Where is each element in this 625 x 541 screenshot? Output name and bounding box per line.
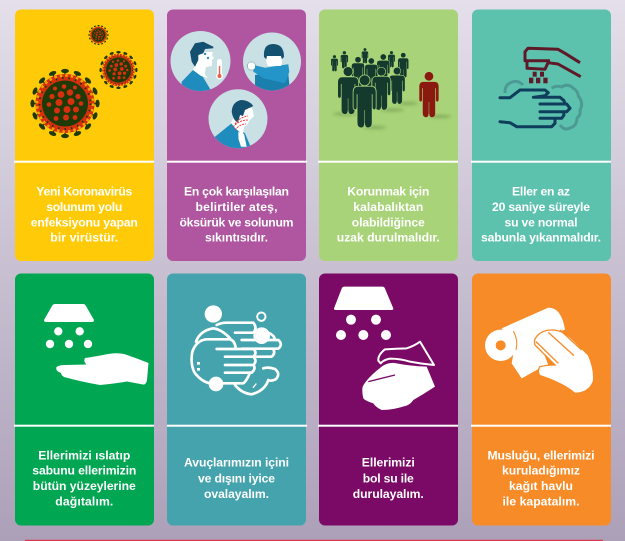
text: washing time description: sabunla yıkanmalıdır. xyxy=(481,231,601,245)
text: symptoms description xyxy=(180,185,294,245)
text: virus description: solunum yolu xyxy=(46,200,122,214)
text: symptoms description: En çok karşılaşılan xyxy=(184,185,289,199)
icon: crowd and lone person xyxy=(331,48,451,129)
text: soap instruction: dağıtalım. xyxy=(55,494,113,508)
text: symptoms description: öksürük ve solunum xyxy=(180,215,294,229)
text: rubbing instruction: ovalayalım. xyxy=(204,487,269,501)
text: rubbing instruction: Avuçlarımızın içini xyxy=(184,456,289,470)
text: virus description: bir virüstür. xyxy=(50,231,118,245)
icon: fever xyxy=(170,31,230,92)
icon: rinsing hands xyxy=(334,287,435,410)
icon: faucet and washing hand xyxy=(500,48,582,129)
icon: breathing difficulty xyxy=(208,89,268,150)
text: symptoms description: sıkıntısıdır. xyxy=(205,231,268,245)
panel: wet and soap xyxy=(14,274,154,526)
text: virus description xyxy=(31,185,138,245)
text: drying instruction: ile kapatalım. xyxy=(502,494,580,508)
figure: lone red person xyxy=(419,72,439,117)
panel: washing time xyxy=(471,10,611,261)
text: drying instruction: kağıt havlu xyxy=(509,479,573,493)
text: washing time description: Eller en az xyxy=(512,185,570,199)
panel: distancing xyxy=(318,10,458,261)
panel: rub hands xyxy=(167,274,307,526)
text: rinse instruction: durulayalım. xyxy=(353,487,424,501)
text: virus description: Yeni Koronavirüs xyxy=(36,185,133,199)
icon: rubbing hands xyxy=(192,305,281,394)
text: drying instruction xyxy=(488,448,594,508)
text: rinse instruction: Ellerimizi xyxy=(362,456,415,470)
text: washing time description: 20 saniye süreyle xyxy=(492,200,590,214)
panel: symptoms xyxy=(167,10,307,261)
icon: coronavirus particles xyxy=(30,25,138,138)
text: symptoms description: belirtiler ateş, xyxy=(196,200,278,214)
text: washing time description: su ve normal xyxy=(504,215,578,229)
text: washing time description xyxy=(481,185,601,245)
text: soap instruction: Ellerimizi ıslatıp xyxy=(38,448,130,462)
text: rubbing instruction xyxy=(184,456,289,501)
text: distancing description xyxy=(337,185,440,245)
text: rinse instruction: bol su ile xyxy=(363,471,414,485)
text: rinse instruction xyxy=(353,456,424,501)
icon: coughing xyxy=(243,32,301,92)
text: distancing description: Korunmak için xyxy=(347,185,429,199)
text: virus description: enfeksiyonu yapan xyxy=(31,215,138,229)
text: soap instruction: bütün yüzeylerine xyxy=(33,479,136,493)
text: distancing description: olabildiğince xyxy=(352,215,425,229)
text: distancing description: uzak durulmalıdır. xyxy=(337,231,440,245)
text: soap instruction xyxy=(32,448,136,508)
text: rubbing instruction: ve dışını iyice xyxy=(198,471,275,485)
icon: paper towel and hand xyxy=(485,308,594,393)
text: drying instruction: kuruladığımız xyxy=(502,464,580,478)
panel: dry xyxy=(471,274,611,526)
text: distancing description: kalabalıktan xyxy=(353,200,423,214)
panel: virus xyxy=(14,10,154,261)
icon: water over palm xyxy=(44,304,148,385)
text: soap instruction: sabunu ellerimizin xyxy=(32,464,136,478)
text: drying instruction: Musluğu, ellerimizi xyxy=(488,448,594,462)
panel: rinse xyxy=(318,274,458,526)
